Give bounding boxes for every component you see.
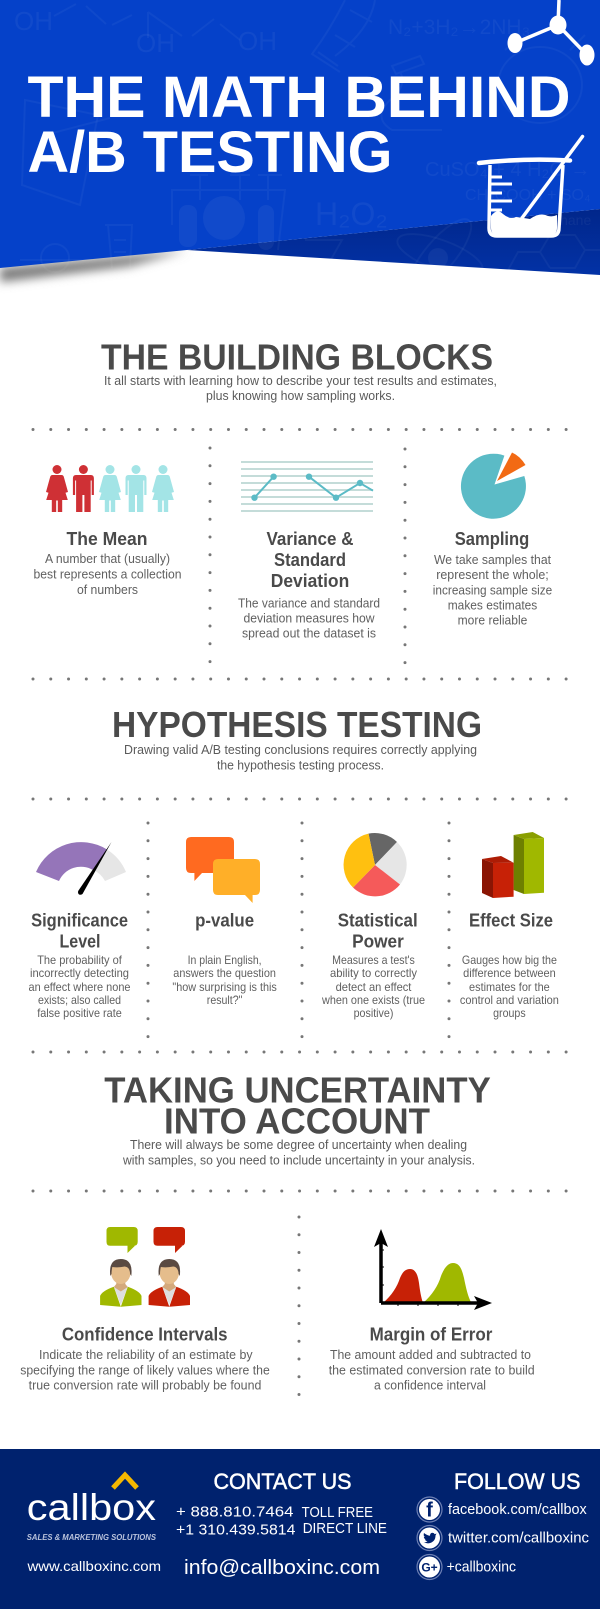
social: facebook: [417, 1497, 587, 1522]
heading: statistical power: [338, 910, 418, 952]
text: significance description: exists; also called: [38, 993, 121, 1007]
text: variance description: [238, 596, 380, 640]
text: statistical power description: when one exists (true: [321, 993, 425, 1007]
panel: header banner: [0, 0, 600, 299]
heading: the building blocks: THE BUILDING BLOCKS: [101, 336, 493, 378]
blue banner: [0, 0, 600, 268]
text: variance description: deviation measures how: [244, 610, 375, 626]
heading: effect size: Effect Size: [469, 910, 553, 930]
panel: margin of error: [329, 1229, 535, 1392]
social: facebook: f: [426, 1500, 433, 1522]
text: effect size description: [460, 953, 559, 1020]
text: confidence intervals description: true conversion rate will probably be found: [29, 1378, 261, 1392]
heading: taking uncertainty into account: TAKING UNCERTAINTY: [104, 1070, 491, 1110]
text: building blocks intro: [104, 373, 497, 403]
text: effect size description: groups: [493, 1006, 526, 1020]
text: p-value description: "how surprising is this: [172, 980, 277, 994]
panel: footer: [0, 1449, 600, 1609]
text: margin of error description: The amount added and subtracted to: [330, 1347, 531, 1362]
panel: significance level: [28, 842, 131, 1020]
text: phone numbers: [176, 1504, 387, 1538]
logo: callbox: SALES & MARKETING SOLUTIONS: [27, 1533, 157, 1542]
heading: significance level: [31, 910, 128, 952]
panel: the mean: [34, 465, 182, 597]
text: margin of error description: the estimated conversion rate to build: [329, 1362, 535, 1378]
heading: significance level: Level: [60, 930, 100, 952]
text: statistical power description: detect an effect: [336, 980, 412, 994]
logo: callbox: [27, 1475, 157, 1542]
heading: taking uncertainty into account: [104, 1070, 491, 1142]
icon: 3d bars: [482, 832, 544, 898]
heading: follow us: FOLLOW US: [454, 1469, 580, 1494]
text: confidence intervals description: [20, 1347, 270, 1392]
text: the mean description: [34, 551, 182, 597]
icon: two people with speech bubbles: [100, 1227, 190, 1307]
text: sampling description: more reliable: [458, 612, 527, 628]
text: effect size description: estimates for the: [469, 980, 550, 994]
text: hypothesis testing intro: Drawing valid A/B testing conclusions requires correctly applying: [124, 742, 477, 757]
heading: p-value: p-value: [195, 910, 254, 930]
heading: hypothesis testing: HYPOTHESIS TESTING: [112, 704, 482, 745]
faint chemistry doodles: OH: [238, 26, 277, 56]
icon: line chart: [241, 462, 373, 511]
heading: statistical power: Statistical: [338, 910, 418, 930]
text: effect size description: control and variation: [460, 993, 559, 1007]
folded dark band: [187, 209, 600, 275]
text: statistical power description: positive): [354, 1006, 393, 1020]
text: significance description: false positive rate: [37, 1006, 122, 1020]
title: THE MATH BEHIND: [28, 65, 570, 130]
text: variance description: spread out the dataset is: [242, 626, 376, 640]
text: uncertainty intro: [122, 1137, 475, 1168]
text: the mean description: of numbers: [77, 582, 138, 597]
text: uncertainty intro: with samples, so you need to include uncertainty in your analysis.: [122, 1152, 475, 1168]
text: sampling description: We take samples that: [434, 552, 551, 567]
faint chemistry doodles: OH: [14, 6, 53, 36]
text: statistical power description: [321, 953, 425, 1020]
faint chemistry doodles: H₂O₂: [315, 196, 388, 232]
text: statistical power description: Measures a test's: [332, 953, 415, 967]
icon: beaker: [479, 136, 582, 236]
heading: sampling: Sampling: [455, 528, 529, 549]
social: google plus: [417, 1554, 516, 1580]
text: significance description: incorrectly detecting: [30, 966, 129, 980]
heading: statistical power: Power: [352, 930, 404, 952]
text: significance description: an effect where none: [28, 980, 131, 994]
title: [28, 65, 570, 185]
text: phone numbers: DIRECT LINE: [303, 1521, 387, 1537]
text: margin of error description: a confidence interval: [374, 1378, 486, 1392]
icon: sampling pie: [461, 452, 526, 519]
text: phone numbers: +1 310.439.5814: [176, 1522, 295, 1538]
text: sampling description: makes estimates: [448, 598, 537, 612]
heading: contact us: CONTACT US: [214, 1469, 352, 1494]
icon: people: [46, 465, 174, 512]
text: website: www.callboxinc.com: [26, 1558, 161, 1574]
text: variance description: The variance and standard: [238, 596, 380, 610]
heading: variance and standard deviation: Variance &: [266, 528, 354, 549]
panel: variance and standard deviation: [238, 462, 380, 640]
panel: sampling: [433, 452, 552, 628]
text: sampling description: [433, 552, 552, 628]
footer background: [0, 1449, 600, 1609]
text: building blocks intro: It all starts with learning how to describe your test results and estimates,: [104, 373, 497, 388]
faint chemistry doodles: OH: [136, 28, 175, 58]
text: the mean description: A number that (usually): [45, 551, 170, 566]
text: significance description: The probability of: [37, 953, 122, 967]
text: email: info@callboxinc.com: [184, 1557, 380, 1579]
text: uncertainty intro: There will always be some degree of uncertainty when dealing: [130, 1137, 467, 1152]
icon: speech bubbles: [186, 837, 260, 903]
faint chemistry doodles: N₂+3H₂→2NH₃: [388, 16, 530, 39]
icon: gauge: [36, 842, 126, 895]
shadow under banner: [0, 250, 187, 282]
title: A/B TESTING: [28, 120, 392, 185]
text: significance description: [28, 953, 131, 1020]
text: confidence intervals description: Indicate the reliability of an estimate by: [39, 1347, 253, 1362]
text: the mean description: best represents a collection: [34, 566, 182, 582]
text: hypothesis testing intro: the hypothesis testing process.: [217, 758, 384, 772]
text: effect size description: difference between: [463, 966, 556, 980]
text: p-value description: [172, 953, 277, 1007]
heading: variance and standard deviation: [266, 528, 354, 591]
heading: variance and standard deviation: Deviation: [271, 570, 349, 591]
faint chemistry doodles: CuSO₄ + 4 H₂O →: [425, 159, 590, 181]
icon: molecule: [508, 0, 594, 66]
text: margin of error description: [329, 1347, 535, 1392]
panel: confidence intervals: [20, 1227, 270, 1392]
text: confidence intervals description: specifying the range of likely values where the: [20, 1362, 270, 1378]
heading: significance level: Significance: [31, 910, 128, 930]
heading: variance and standard deviation: Standard: [274, 549, 346, 570]
heading: the mean: The Mean: [66, 528, 148, 549]
heading: confidence intervals: Confidence Intervals: [62, 1324, 228, 1344]
logo: callbox: callbox: [27, 1487, 157, 1528]
text: p-value description: In plain English,: [188, 953, 262, 967]
social: facebook: facebook.com/callbox: [448, 1502, 587, 1518]
icon: distribution chart: [374, 1229, 492, 1310]
text: sampling description: increasing sample size: [433, 582, 552, 598]
text: phone numbers: + 888.810.7464: [176, 1504, 294, 1520]
faint chemistry doodles: CH₃ + Ethane: [505, 212, 591, 228]
text: building blocks intro: plus knowing how sampling works.: [206, 388, 395, 403]
social: google plus: G+: [421, 1560, 438, 1574]
text: phone numbers: TOLL FREE: [302, 1505, 373, 1521]
text: effect size description: Gauges how big the: [462, 953, 557, 967]
text: p-value description: answers the question: [173, 966, 276, 980]
panel: statistical power: [321, 833, 425, 1020]
text: statistical power description: ability to correctly: [330, 966, 417, 980]
text: p-value description: result?": [207, 993, 242, 1007]
text: hypothesis testing intro: [124, 742, 477, 772]
panel: effect size: [460, 832, 559, 1020]
icon: multi-slice pie: [344, 833, 407, 896]
faint chemistry doodles: CH₃COOH + SO₄: [465, 187, 591, 204]
text: sampling description: represent the whole;: [436, 567, 549, 582]
faint chemistry doodles: [14, 0, 600, 299]
social: twitter: [417, 1526, 589, 1550]
panel: p-value: [172, 837, 277, 1007]
social: twitter: twitter.com/callboxinc: [448, 1530, 589, 1546]
heading: taking uncertainty into account: INTO ACCOUNT: [164, 1100, 430, 1142]
social: google plus: +callboxinc: [447, 1560, 516, 1576]
heading: margin of error: Margin of Error: [370, 1324, 492, 1344]
